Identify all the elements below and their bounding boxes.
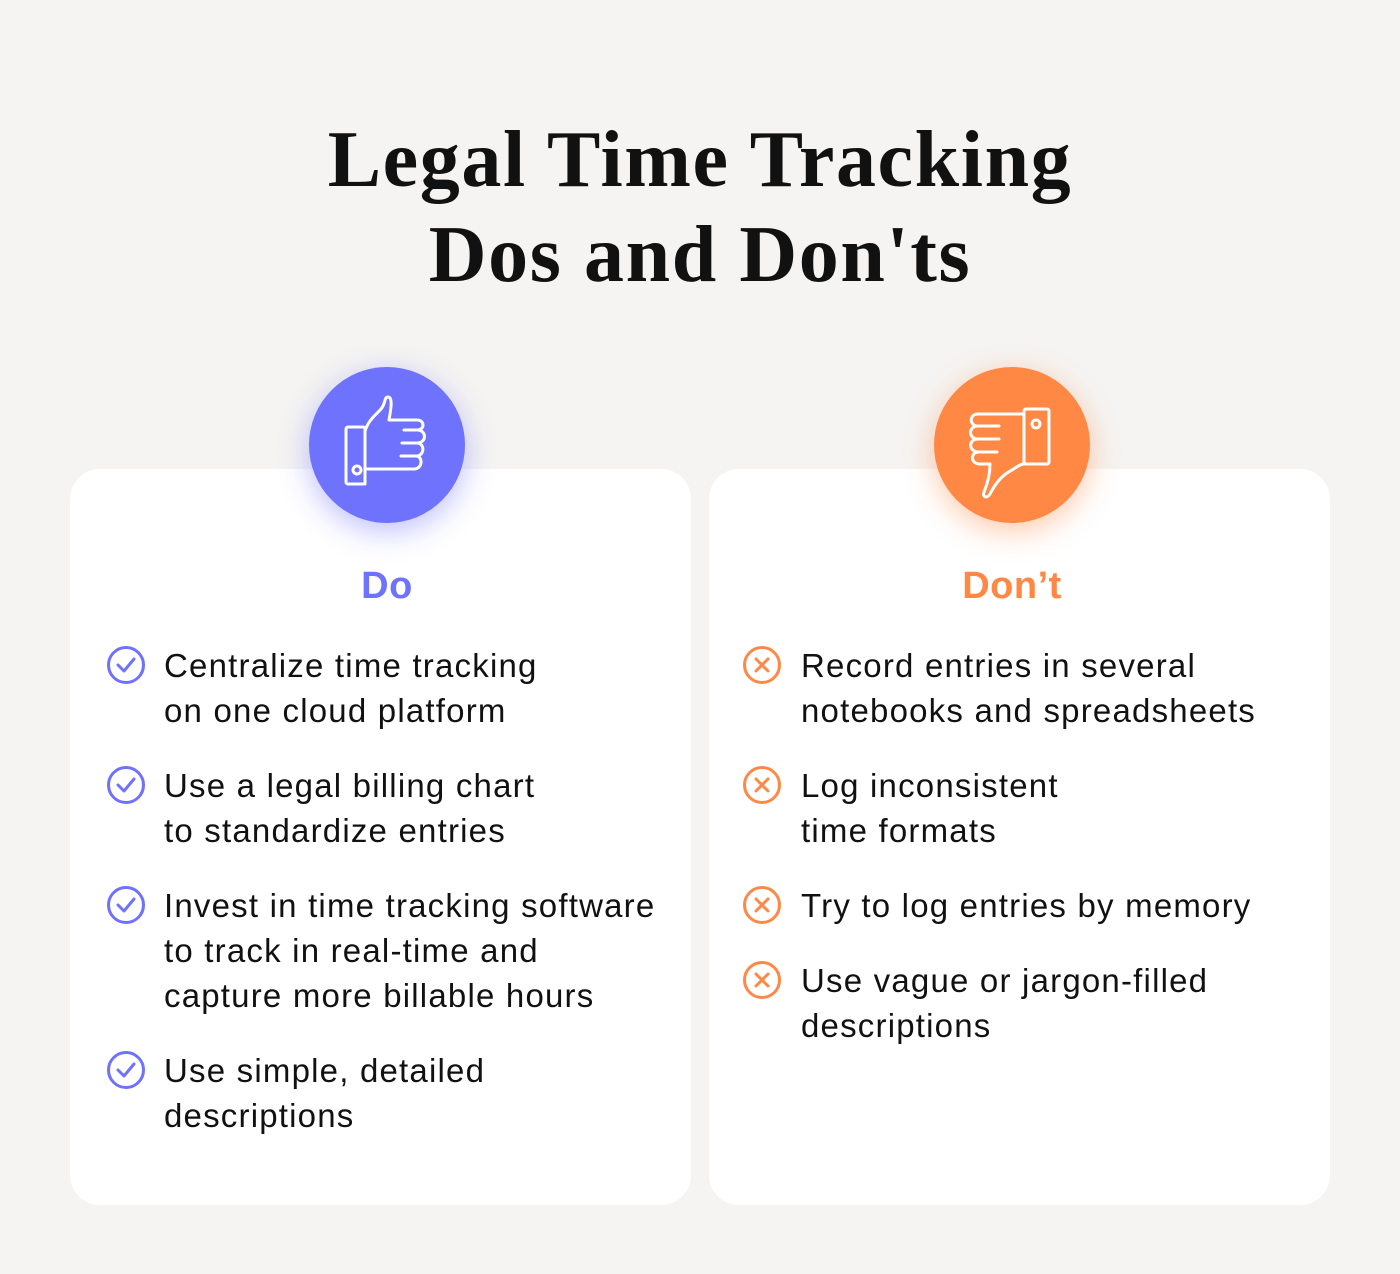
text: do 3: to track in real-time and [164, 932, 539, 969]
text: do 2 [164, 767, 535, 849]
title: Legal Time Tracking [328, 116, 1072, 204]
text: do 1 [164, 647, 538, 729]
text: do 1: Centralize time tracking [164, 647, 538, 684]
icon: x 1 [743, 646, 781, 684]
list: do items [107, 646, 655, 1134]
text: dont 4: descriptions [801, 1007, 992, 1044]
text: dont 2: Log inconsistent [801, 767, 1059, 804]
icon: thumbs down [934, 367, 1090, 523]
text: do 3 [164, 887, 655, 1014]
icon: check 2 [107, 766, 145, 804]
text: do 4: Use simple, detailed [164, 1052, 485, 1089]
text: dont 4: Use vague or jargon-filled [801, 962, 1208, 999]
heading: Don't: Don’t [962, 565, 1062, 607]
text: dont 1: Record entries in several [801, 647, 1196, 684]
title: Dos and Don'ts [429, 211, 971, 299]
list: dont items [743, 646, 1256, 1044]
icon: check 4 [107, 1051, 145, 1089]
text: do 2: to standardize entries [164, 812, 506, 849]
icon: check 3 [107, 886, 145, 924]
icon: check 1 [107, 646, 145, 684]
text: dont 2 [801, 767, 1059, 849]
text: dont 1 [801, 647, 1256, 729]
text: do 3: Invest in time tracking software [164, 887, 655, 924]
text: dont 1: notebooks and spreadsheets [801, 692, 1256, 729]
text: do 4: descriptions [164, 1097, 354, 1134]
text: do 4 [164, 1052, 485, 1134]
text: do 1: on one cloud platform [164, 692, 507, 729]
icon: x 4 [743, 961, 781, 999]
text: dont 4 [801, 962, 1208, 1044]
heading: Do: Do [361, 565, 413, 607]
text: do 3: capture more billable hours [164, 977, 594, 1014]
text: dont 2: time formats [801, 812, 997, 849]
text: do 2: Use a legal billing chart [164, 767, 535, 804]
title [328, 116, 1072, 299]
icon: x 3 [743, 886, 781, 924]
panel: do [70, 469, 691, 1205]
text: dont 3: Try to log entries by memory [801, 887, 1252, 924]
panel: dont [709, 469, 1330, 1205]
icon: thumbs up [309, 367, 465, 523]
icon: x 2 [743, 766, 781, 804]
